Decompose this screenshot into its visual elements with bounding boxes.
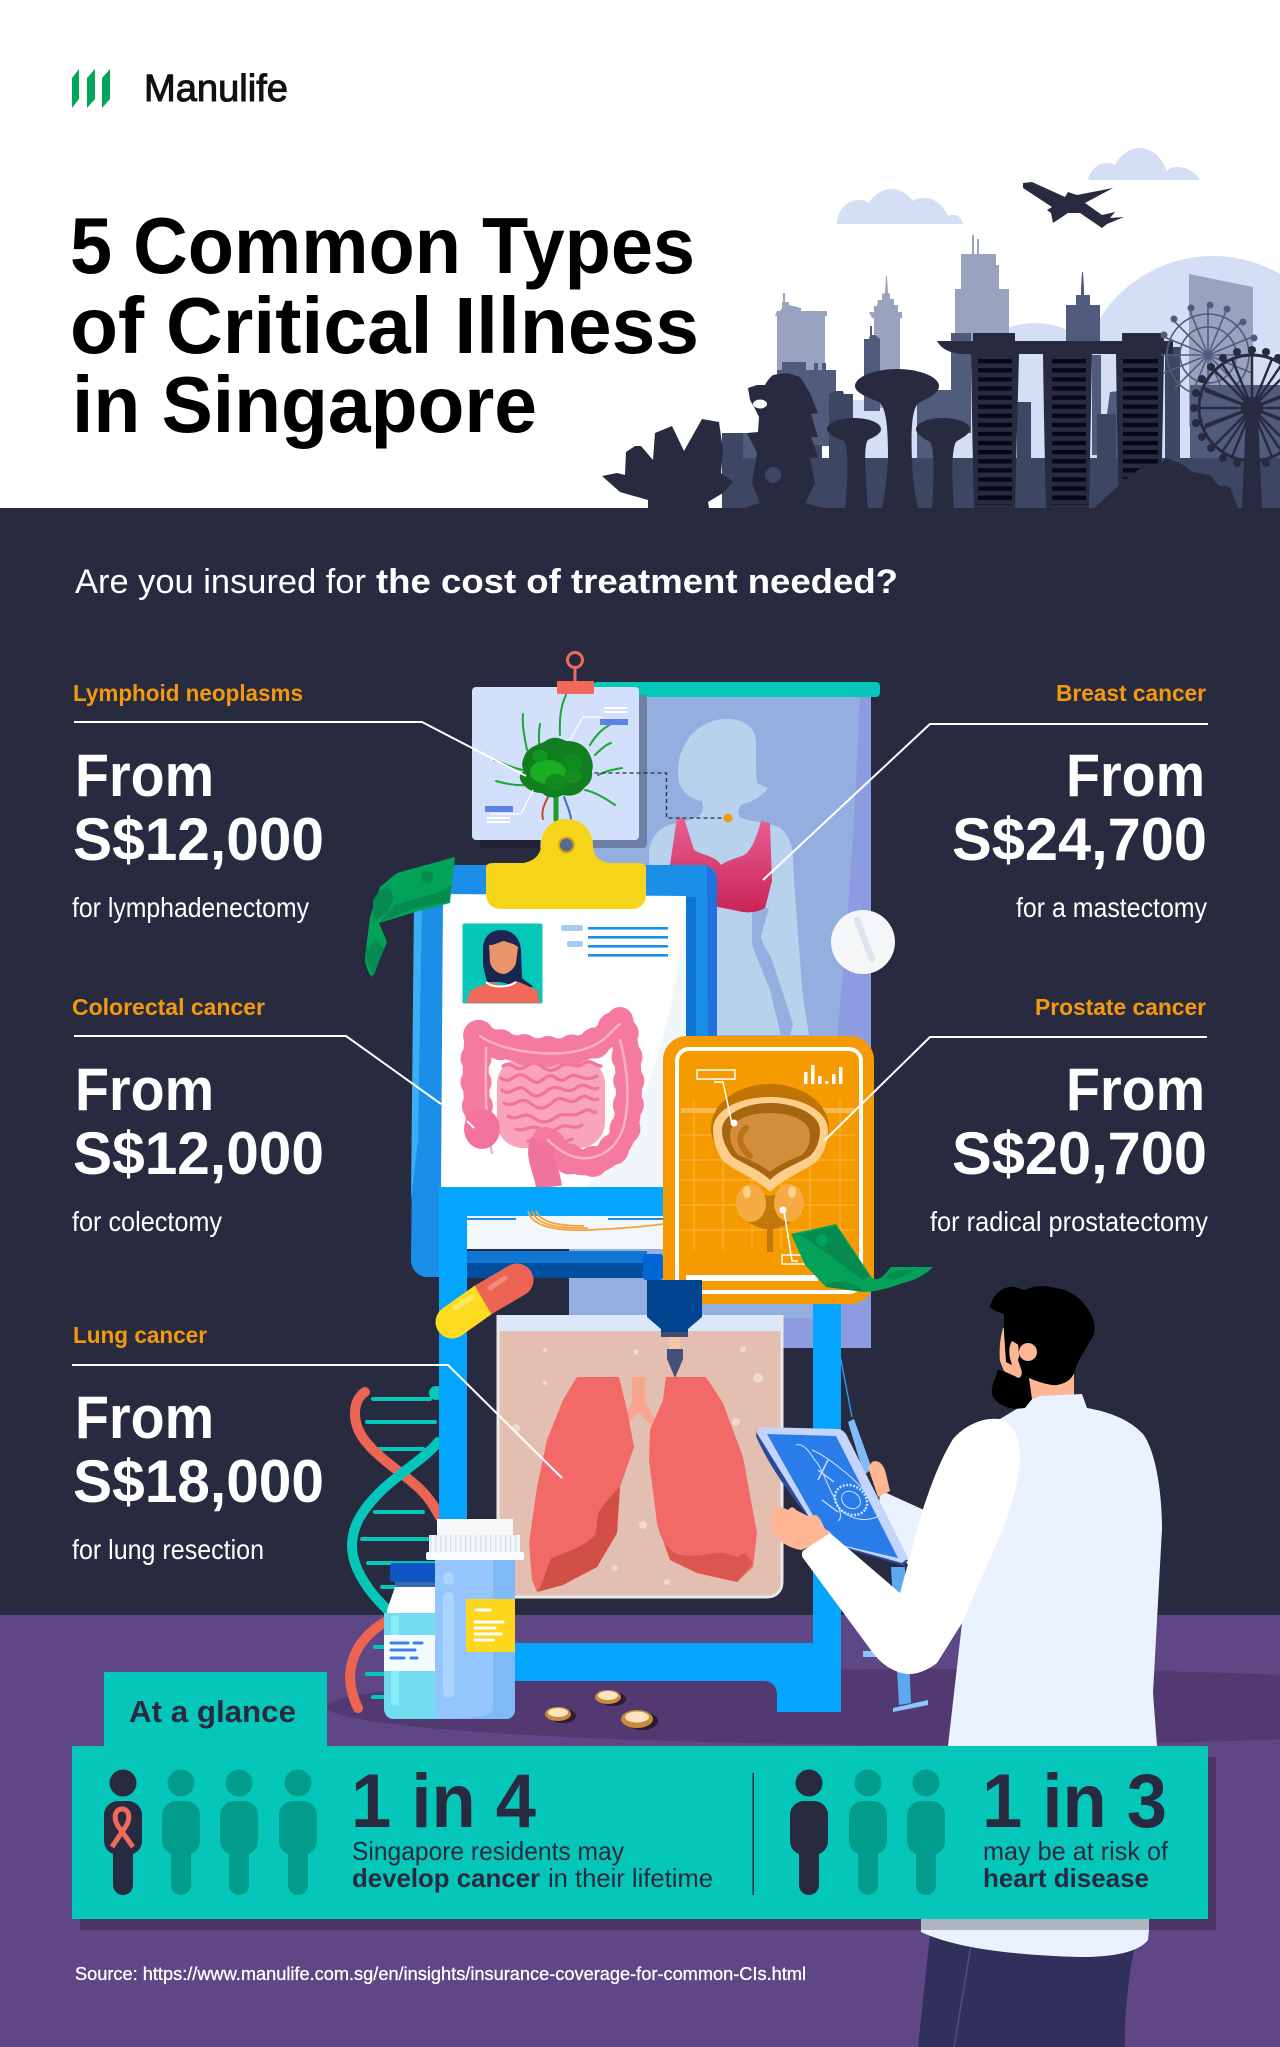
item: Prostate cancer (930, 994, 1208, 1237)
cecum (464, 1109, 500, 1149)
teal knob (429, 1386, 443, 1400)
back sleeve (878, 1490, 924, 1565)
card labels (485, 707, 628, 823)
bubbles (512, 1346, 763, 1585)
yellow clip (486, 819, 646, 909)
patient record lines (561, 925, 668, 957)
syringe (840, 1355, 928, 1712)
body silhouette (649, 719, 809, 1035)
Prostate leader (825, 1037, 1207, 1140)
capsule (452, 1278, 517, 1322)
medium towers (742, 272, 1280, 461)
callout dots (730, 1120, 786, 1214)
beard (992, 1344, 1032, 1409)
prostate glands (736, 1184, 804, 1252)
left lung (529, 1377, 634, 1592)
clipboard side highlight (411, 900, 422, 1200)
dark main background (0, 508, 1280, 1615)
wordmark: Manulife (144, 68, 288, 110)
neck (1026, 1370, 1074, 1402)
hair (990, 1286, 1095, 1385)
purple floor background (0, 1615, 1280, 2047)
clipboard body (411, 865, 717, 1277)
strip lines and wires (467, 1211, 664, 1230)
big ferris wheel (1190, 346, 1280, 508)
item: Colorectal cancer: Colorectal cancer (72, 994, 265, 1020)
item: Colorectal cancer: S$12,000 (73, 1120, 324, 1187)
Marina Bay Sands (937, 333, 1173, 508)
title: in Singapore (72, 360, 537, 449)
chart bars icon (804, 1065, 842, 1084)
item: Prostate cancer: for radical prostatectomy (930, 1206, 1208, 1237)
light towers (775, 235, 1253, 427)
face (1000, 1328, 1030, 1379)
rectum (541, 1142, 549, 1187)
paper shading (586, 900, 686, 1187)
small intestine (497, 1058, 605, 1148)
subtitle: Are you insured for (75, 563, 366, 601)
lymph node card (472, 652, 732, 848)
tablet (756, 1427, 908, 1566)
subtitle: the cost of treatment needed? (376, 563, 898, 601)
board panel (569, 697, 871, 1348)
colon (476, 1020, 629, 1162)
clipboard hinge bar (467, 1251, 663, 1280)
panel: at a glance (72, 1672, 1216, 1930)
illustration: Singapore skyline (602, 148, 1280, 524)
item: Lymphoid neoplasms: for lymphadenectomy (72, 892, 309, 923)
stat: 1 in 4: in their lifetime (548, 1863, 713, 1893)
stat: 1 in 4: develop cancer (352, 1863, 540, 1893)
red binder clip (557, 652, 594, 694)
Colorectal leader (74, 1036, 474, 1128)
lower paper strip (467, 1216, 663, 1249)
small observation wheel (1160, 302, 1258, 402)
dark blue base buildings (722, 347, 1280, 508)
lower blue band overlay (439, 1187, 665, 1216)
dropper (647, 1280, 702, 1378)
people group: 1 in 4 (104, 1770, 317, 1895)
green tumour (520, 738, 593, 797)
stat: 1 in 3 (982, 1759, 1169, 1893)
item: Lymphoid neoplasms: S$12,000 (73, 806, 324, 873)
coins (545, 1690, 658, 1730)
item: Lymphoid neoplasms: From (75, 742, 214, 809)
small bottle (384, 1563, 445, 1719)
Merlion details (753, 400, 781, 483)
teal rail (593, 682, 880, 697)
panel shadow (80, 1757, 1216, 1930)
stat: 1 in 4: 1 in 4 (351, 1759, 536, 1844)
bronchi (623, 1377, 657, 1427)
Lung leader (72, 1365, 562, 1478)
icon: awareness ribbon (112, 1809, 133, 1847)
stat: 1 in 3: heart disease (983, 1863, 1149, 1893)
orange marker (724, 814, 732, 822)
right lung shading (657, 1523, 753, 1582)
tab heading: At a glance (129, 1694, 296, 1729)
card base bar (686, 1275, 818, 1281)
clouds (837, 148, 1200, 224)
colon band (480, 1024, 627, 1158)
Merlion statue (745, 373, 823, 508)
coral strand (355, 1392, 440, 1517)
bladder (711, 1084, 829, 1192)
pink bra (653, 818, 772, 912)
clipboard right edge (707, 866, 717, 1054)
title (70, 201, 699, 449)
item: Prostate cancer: Prostate cancer (1035, 994, 1206, 1020)
item: Breast cancer (952, 680, 1207, 923)
card (472, 687, 639, 840)
left lung shading (537, 1487, 620, 1592)
Breast leader (763, 724, 1208, 880)
teal strand (352, 1442, 438, 1612)
doctor figure (756, 1286, 1162, 2047)
item: Lung cancer: for lung resection (72, 1534, 264, 1565)
stat: 1 in 3: may be at risk of (983, 1836, 1169, 1866)
x-ray board (569, 682, 880, 1348)
tumour tendrils (494, 695, 622, 820)
stat: 1 in 3: 1 in 3 (982, 1759, 1167, 1844)
teal bar (72, 1746, 1208, 1919)
item: Breast cancer: S$24,700 (952, 806, 1207, 873)
frame leg over helix (439, 1187, 467, 1519)
tablet scan lines (796, 1445, 878, 1521)
item: Breast cancer: for a mastectomy (1016, 892, 1207, 923)
item: Prostate cancer: From (1066, 1056, 1205, 1123)
subtitle (75, 563, 898, 601)
back hand (868, 1461, 890, 1497)
item: Colorectal cancer: From (75, 1056, 214, 1123)
bottles (384, 1519, 524, 1719)
Lymphoid leader (74, 722, 526, 776)
item: Lymphoid neoplasms: Lymphoid neoplasms (73, 680, 303, 706)
card callouts (697, 1070, 818, 1264)
large pill bottle (426, 1519, 524, 1719)
icon: Manulife stripes (72, 69, 110, 108)
item: Colorectal cancer (72, 994, 324, 1237)
front sleeve arm (802, 1419, 1020, 1674)
beaker with lungs (497, 1315, 783, 1597)
board side strip (783, 697, 871, 1348)
clipboard (411, 819, 717, 1280)
coat (921, 1394, 1162, 1957)
title: 5 Common Types (70, 201, 695, 290)
money: right banknote (791, 1224, 933, 1292)
item: Lung cancer: Lung cancer (73, 1322, 207, 1348)
clip hole (559, 838, 574, 852)
prostate card (663, 1036, 874, 1304)
header background (0, 0, 1280, 508)
tree hill (1094, 458, 1238, 508)
people group: 1 in 3 (790, 1770, 945, 1895)
intestines (464, 1020, 629, 1187)
item: Lung cancer: From (75, 1384, 214, 1451)
item: Lung cancer: S$18,000 (73, 1448, 324, 1515)
small intestine folds (501, 1062, 601, 1143)
card shadow (480, 695, 647, 848)
item: Prostate cancer: S$20,700 (952, 1120, 1207, 1187)
card grid (681, 1100, 855, 1250)
blue frame (439, 1187, 841, 1712)
ArtScience Museum (602, 419, 733, 508)
paper (441, 894, 686, 1187)
icon: airplane (1023, 182, 1124, 228)
beaker liquid (499, 1331, 781, 1597)
DNA rungs (362, 1399, 440, 1697)
DNA helix (350, 1386, 443, 1708)
white pill (831, 910, 895, 974)
stat: 1 in 4: Singapore residents may (352, 1836, 624, 1866)
body crease (752, 908, 793, 1036)
tab (104, 1672, 327, 1748)
floor shadow ellipse (327, 1669, 1280, 1745)
callout lines (72, 722, 1208, 1478)
right lung (649, 1377, 757, 1582)
source note: Source: https://www.manulife.com.sg/en/insights/insurance-coverage-for-common-CIs.html (75, 1964, 806, 1984)
stat: 1 in 4 (351, 1759, 713, 1893)
coral strand lower (350, 1622, 385, 1708)
item: Breast cancer: Breast cancer (1056, 680, 1206, 706)
pale hills (853, 256, 1280, 458)
supertrees (827, 369, 970, 508)
front hand (771, 1506, 831, 1550)
logo: Manulife (72, 68, 288, 110)
beaker rim (497, 1315, 783, 1331)
title: of Critical Illness (70, 281, 699, 370)
item: Colorectal cancer: for colectomy (72, 1206, 222, 1237)
trouser crease (954, 1945, 971, 2047)
clipboard inner edge (686, 897, 696, 1037)
money: left banknote (365, 857, 455, 977)
item: Breast cancer: From (1066, 742, 1205, 809)
patient portrait (462, 924, 542, 1004)
coat shadow on hem (921, 1919, 1149, 1930)
item: Lymphoid neoplasms (72, 680, 324, 923)
ear (1019, 1343, 1037, 1361)
beaker wall (498, 1315, 782, 1597)
trousers (918, 1935, 1137, 2047)
item: Lung cancer (72, 1322, 324, 1565)
colon beads (476, 1020, 629, 1162)
dashed connector (594, 773, 725, 818)
card dark shadow (480, 832, 540, 848)
